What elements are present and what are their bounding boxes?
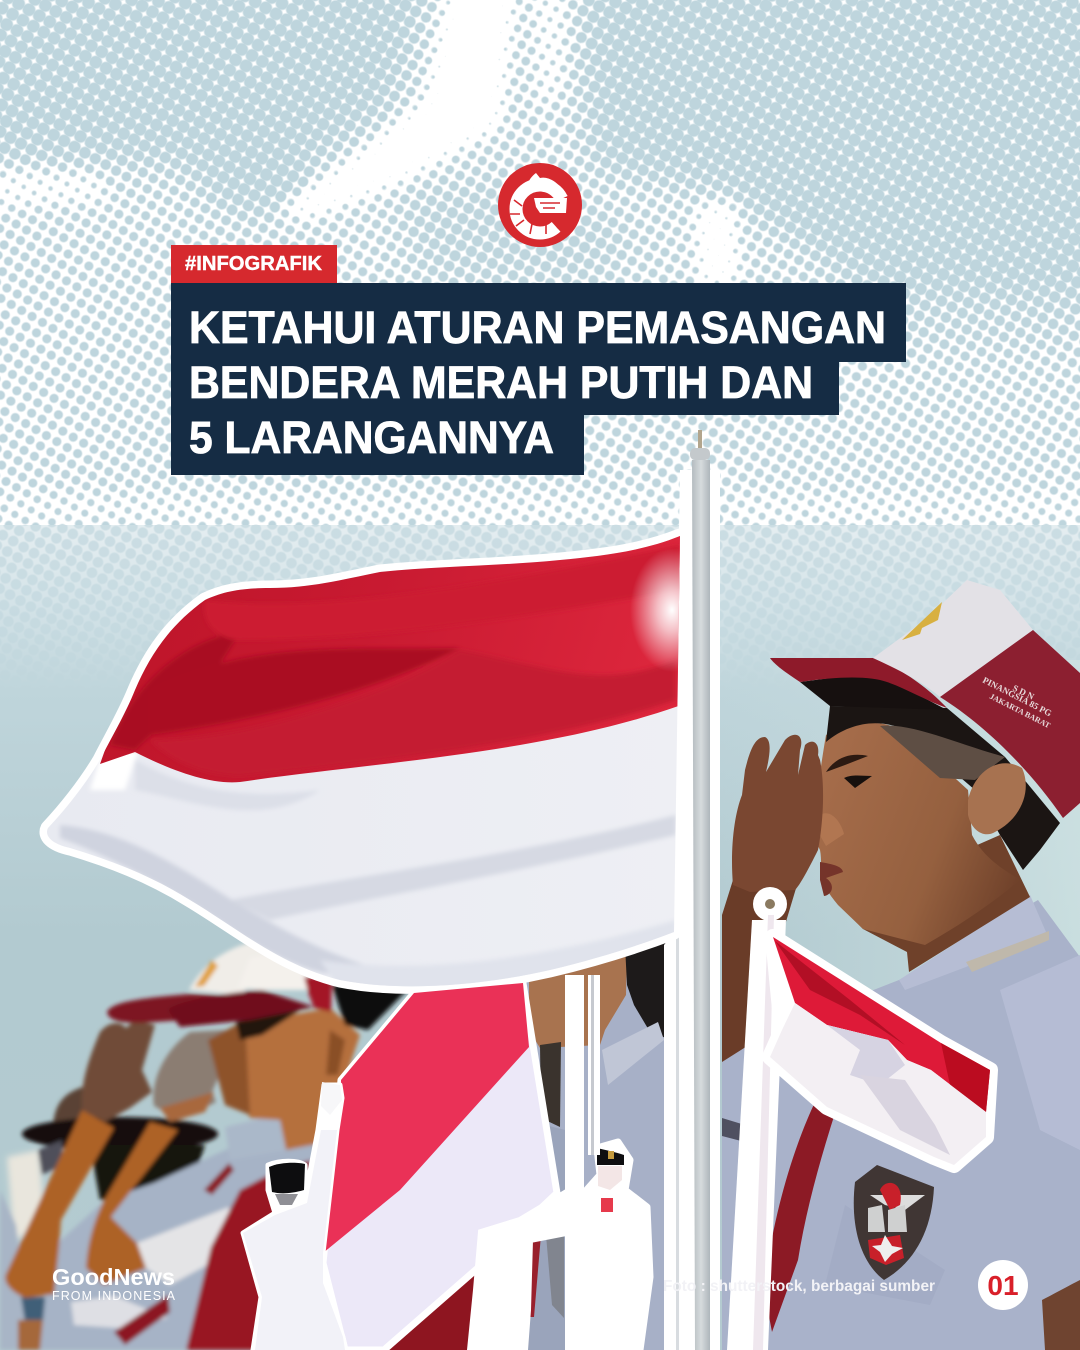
front student head	[208, 985, 412, 1150]
forearm	[722, 880, 797, 1062]
hair	[826, 706, 1060, 870]
flag outline	[47, 536, 680, 986]
photo: student behind poles	[380, 940, 666, 1350]
title block: KETAHUI ATURAN PEMASANGAN	[189, 302, 886, 353]
title block	[171, 283, 906, 475]
source credit: Foto : shutterstock, berbagai sumber	[663, 1278, 935, 1295]
photo: blurred students saluting, bottom left	[0, 940, 412, 1350]
cap: S D N	[1011, 683, 1036, 702]
right flag bearers	[470, 1142, 650, 1350]
brand: GoodNews from Indonesia: GoodNews	[52, 1264, 175, 1290]
second pole lines	[565, 975, 600, 1350]
cap	[770, 580, 1080, 818]
title block: BENDERA MERAH PUTIH DAN	[189, 357, 813, 408]
black cap	[269, 1163, 305, 1193]
cloth with outline	[323, 983, 557, 1350]
big red and white flag	[30, 520, 714, 1000]
tag: #INFOGRAFIK: #INFOGRAFIK	[185, 253, 323, 275]
page number badge: 01	[987, 1270, 1019, 1301]
shirts	[40, 1112, 325, 1350]
maroon school caps	[107, 940, 332, 1027]
logo: GNFI red eagle emblem	[498, 163, 582, 247]
red band	[100, 520, 690, 782]
cap: PINANGSIA 85 PG	[981, 675, 1053, 718]
title block: 5 LARANGANNYA	[189, 412, 554, 463]
back student hat	[22, 1085, 218, 1200]
arms	[5, 1110, 178, 1298]
tag: #INFOGRAFIK	[171, 245, 337, 283]
photo: saluting boy with maroon cap	[722, 580, 1080, 1350]
white band folds	[60, 740, 676, 990]
shirt	[722, 895, 1080, 1350]
ear	[968, 763, 1026, 834]
neck and face	[812, 723, 1030, 972]
flag cloth	[47, 536, 680, 986]
red band	[323, 983, 529, 1253]
page number badge	[978, 1260, 1028, 1310]
sash	[764, 1100, 836, 1332]
red vest	[114, 1160, 311, 1350]
left edge shirt and bright spot	[0, 1150, 60, 1350]
figure in front of the student	[470, 1193, 566, 1350]
hand	[732, 735, 823, 892]
small flag	[770, 937, 990, 1165]
saluting bearer	[584, 1142, 650, 1350]
school badge	[854, 1165, 934, 1280]
main pole	[664, 430, 720, 1350]
brand: GoodNews from Indonesia	[52, 1264, 176, 1303]
maroon vest under flag	[380, 1262, 480, 1350]
small flag pole	[727, 887, 787, 1350]
glove	[321, 1082, 342, 1115]
eye and brow	[814, 755, 872, 896]
cap: JAKARTA BARAT	[988, 692, 1052, 730]
centre flag held by flag bearers	[323, 983, 557, 1350]
brand: GoodNews from Indonesia: FROM INDONESIA	[52, 1289, 176, 1303]
left flag bearer	[243, 1082, 346, 1350]
saluting hands	[82, 1020, 228, 1122]
